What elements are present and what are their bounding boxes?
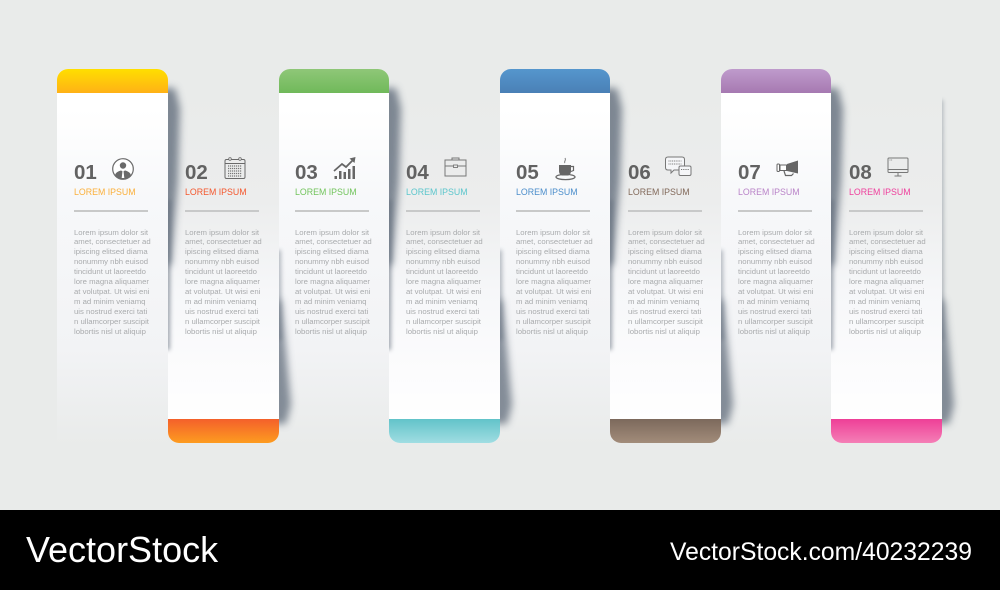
body text: amet, consectetuer ad — [516, 237, 593, 246]
body text: tincidunt ut laoreetdo — [295, 267, 367, 276]
body text: n ullamcorper suscipit — [74, 317, 149, 326]
step 3 content — [295, 157, 372, 336]
tab: orange — [168, 419, 279, 443]
step 1 content — [74, 158, 151, 336]
heading: LOREM IPSUM — [295, 186, 357, 196]
body text: ipiscing elitsed diama — [295, 247, 369, 256]
panel: step 1 — [57, 69, 168, 445]
body text: lore magna aliquamer — [628, 277, 703, 286]
body text: ipiscing elitsed diama — [628, 247, 702, 256]
heading: LOREM IPSUM — [849, 186, 911, 196]
body text: tincidunt ut laoreetdo — [185, 267, 257, 276]
body text: nonummy nbh euisod — [295, 257, 369, 266]
body text: amet, consectetuer ad — [74, 237, 151, 246]
body text: n ullamcorper suscipit — [849, 317, 924, 326]
body text: nonummy nbh euisod — [738, 257, 812, 266]
body text: at volutpat. Ut wisi eni — [516, 287, 591, 296]
body text: amet, consectetuer ad — [738, 237, 815, 246]
body text: tincidunt ut laoreetdo — [849, 267, 921, 276]
tab: purple — [721, 69, 831, 92]
body text: m ad minim veniamq — [516, 297, 588, 306]
body text — [406, 228, 483, 336]
body text: lobortis nisl ut aliquip — [406, 327, 478, 336]
panel: step 2 — [168, 92, 279, 443]
icon: briefcase — [444, 158, 466, 176]
number: 02 — [185, 161, 208, 184]
body text: ipiscing elitsed diama — [185, 247, 259, 256]
panel: step 5 — [500, 69, 610, 445]
image id: VectorStock.com/40232239 — [670, 539, 972, 566]
body text — [849, 228, 926, 336]
tab: green — [279, 69, 389, 92]
body text: Lorem ipsum dolor sit — [406, 228, 480, 236]
heading: LOREM IPSUM — [628, 186, 690, 196]
panel: step 3 — [279, 69, 389, 445]
body text: at volutpat. Ut wisi eni — [74, 287, 149, 296]
tab: blue — [500, 69, 610, 92]
body text: uis nostrud exerci tati — [738, 307, 811, 316]
body text: tincidunt ut laoreetdo — [406, 267, 478, 276]
tab: brown — [610, 419, 721, 443]
body text: Lorem ipsum dolor sit — [185, 228, 259, 236]
body text: Lorem ipsum dolor sit — [849, 228, 923, 236]
body text: lore magna aliquamer — [738, 277, 813, 286]
step 6 content — [628, 156, 705, 336]
body text: m ad minim veniamq — [295, 297, 366, 306]
heading: LOREM IPSUM — [738, 186, 800, 196]
body text: n ullamcorper suscipit — [516, 317, 591, 326]
panel: step 7 — [721, 69, 831, 445]
body text: m ad minim veniamq — [406, 297, 478, 306]
body text: nonummy nbh euisod — [74, 257, 148, 266]
body text: m ad minim veniamq — [185, 297, 256, 306]
body text: nonummy nbh euisod — [406, 257, 480, 266]
body text: lore magna aliquamer — [185, 277, 260, 286]
body text: lobortis nisl ut aliquip — [295, 327, 367, 336]
step 8 content — [849, 158, 926, 336]
body text: amet, consectetuer ad — [295, 237, 372, 246]
heading: LOREM IPSUM — [516, 186, 578, 196]
brand wordmark: VectorStock — [26, 529, 218, 570]
body text: lobortis nisl ut aliquip — [185, 327, 257, 336]
body text: lore magna aliquamer — [74, 277, 149, 286]
step 5 content — [516, 158, 593, 336]
body text: Lorem ipsum dolor sit — [295, 228, 369, 236]
body text: Lorem ipsum dolor sit — [738, 228, 812, 236]
body text: amet, consectetuer ad — [406, 237, 483, 246]
body text: lore magna aliquamer — [406, 277, 481, 286]
body text — [185, 228, 262, 336]
icon: calendar — [224, 157, 246, 179]
heading: LOREM IPSUM — [185, 186, 247, 196]
body text: nonummy nbh euisod — [516, 257, 590, 266]
body text: ipiscing elitsed diama — [406, 247, 480, 256]
body text: n ullamcorper suscipit — [185, 317, 260, 326]
body text: uis nostrud exerci tati — [74, 307, 147, 316]
body text — [74, 228, 151, 336]
body text: amet, consectetuer ad — [185, 237, 262, 246]
icon: speech bubbles — [665, 156, 692, 176]
step 7 content — [738, 160, 815, 336]
tab: pink — [831, 419, 942, 443]
number: 04 — [406, 161, 429, 184]
body text: m ad minim veniamq — [738, 297, 810, 306]
body text: lore magna aliquamer — [516, 277, 591, 286]
body text: at volutpat. Ut wisi eni — [738, 287, 813, 296]
number: 07 — [738, 161, 761, 184]
tab: yellow — [57, 69, 168, 92]
body text: ipiscing elitsed diama — [738, 247, 812, 256]
panel: step 8 — [831, 92, 942, 443]
body text: nonummy nbh euisod — [849, 257, 923, 266]
body text: uis nostrud exerci tati — [516, 307, 589, 316]
body text: m ad minim veniamq — [849, 297, 920, 306]
body text — [295, 228, 372, 336]
icon: monitor — [888, 158, 908, 176]
body text: lobortis nisl ut aliquip — [516, 327, 588, 336]
body text: lobortis nisl ut aliquip — [738, 327, 810, 336]
body text: n ullamcorper suscipit — [295, 317, 370, 326]
step 2 content — [185, 157, 262, 336]
body text: at volutpat. Ut wisi eni — [295, 287, 370, 296]
body text: Lorem ipsum dolor sit — [74, 228, 148, 236]
body text: tincidunt ut laoreetdo — [628, 267, 700, 276]
icon: businessman — [112, 158, 134, 180]
heading: LOREM IPSUM — [406, 186, 468, 196]
body text: tincidunt ut laoreetdo — [516, 267, 588, 276]
body text: tincidunt ut laoreetdo — [738, 267, 810, 276]
body text: m ad minim veniamq — [628, 297, 700, 306]
body text: nonummy nbh euisod — [628, 257, 702, 266]
body text: uis nostrud exerci tati — [295, 307, 368, 316]
body text: lobortis nisl ut aliquip — [628, 327, 700, 336]
body text: amet, consectetuer ad — [849, 237, 926, 246]
body text: at volutpat. Ut wisi eni — [185, 287, 260, 296]
icon: growth chart — [334, 157, 356, 179]
number: 05 — [516, 161, 539, 184]
body text: nonummy nbh euisod — [185, 257, 259, 266]
icon: megaphone — [776, 160, 798, 176]
body text: at volutpat. Ut wisi eni — [849, 287, 924, 296]
body text: at volutpat. Ut wisi eni — [406, 287, 481, 296]
body text: ipiscing elitsed diama — [849, 247, 923, 256]
body text: lore magna aliquamer — [295, 277, 370, 286]
body text: uis nostrud exerci tati — [185, 307, 258, 316]
number: 08 — [849, 161, 872, 184]
number: 06 — [628, 161, 651, 184]
body text: Lorem ipsum dolor sit — [516, 228, 590, 236]
body text: n ullamcorper suscipit — [738, 317, 813, 326]
number: 01 — [74, 161, 97, 184]
tab: teal — [389, 419, 500, 443]
body text: lobortis nisl ut aliquip — [849, 327, 921, 336]
body text — [628, 228, 705, 336]
heading: LOREM IPSUM — [74, 186, 136, 196]
body text: uis nostrud exerci tati — [406, 307, 479, 316]
body text: n ullamcorper suscipit — [628, 317, 703, 326]
number: 03 — [295, 161, 318, 184]
body text: amet, consectetuer ad — [628, 237, 705, 246]
body text: at volutpat. Ut wisi eni — [628, 287, 703, 296]
body text: Lorem ipsum dolor sit — [628, 228, 702, 236]
body text: ipiscing elitsed diama — [516, 247, 590, 256]
body text: lore magna aliquamer — [849, 277, 924, 286]
body text — [516, 228, 593, 336]
body text: m ad minim veniamq — [74, 297, 146, 306]
footer bar — [0, 510, 1000, 590]
body text: n ullamcorper suscipit — [406, 317, 481, 326]
body text: ipiscing elitsed diama — [74, 247, 148, 256]
panel: step 6 — [610, 92, 721, 443]
body text: uis nostrud exerci tati — [849, 307, 922, 316]
body text — [738, 228, 815, 336]
step 4 content — [406, 158, 483, 336]
body text: uis nostrud exerci tati — [628, 307, 701, 316]
body text: tincidunt ut laoreetdo — [74, 267, 146, 276]
panel: step 4 — [389, 92, 500, 443]
icon: coffee cup — [555, 158, 576, 180]
body text: lobortis nisl ut aliquip — [74, 327, 146, 336]
